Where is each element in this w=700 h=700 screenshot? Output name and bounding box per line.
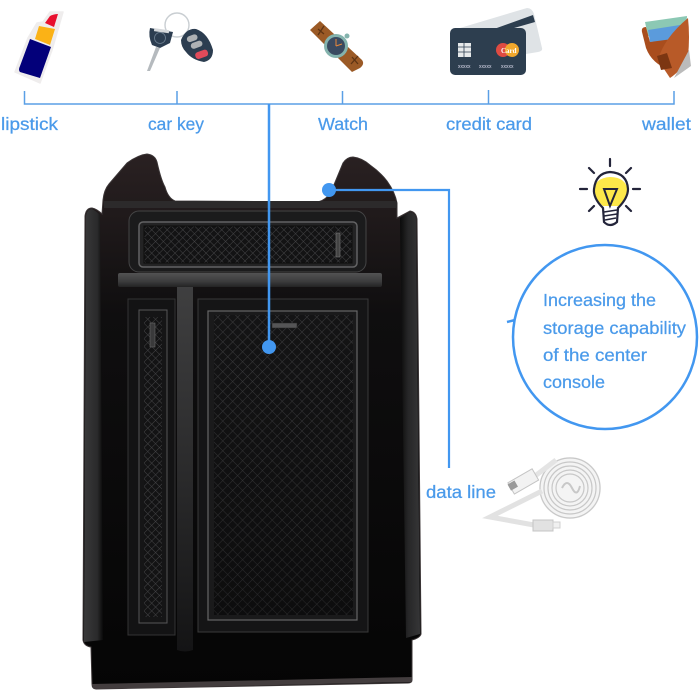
label: Watch: Watch	[318, 114, 368, 134]
callout text: Increasing the	[543, 290, 656, 310]
icon: credit card: xxxxx	[479, 64, 492, 70]
callout: contents line to tray	[262, 104, 276, 354]
callout: data line connector	[322, 183, 449, 468]
label: wallet: wallet	[641, 114, 691, 134]
icon: data cable	[490, 457, 601, 531]
circle outline	[507, 245, 697, 429]
label: lipstick: lipstick	[1, 114, 58, 134]
icon: credit card: xxxxx	[458, 64, 471, 70]
bottom lip	[92, 677, 412, 689]
left wall highlight	[84, 209, 103, 642]
callout text: console	[543, 372, 605, 392]
right wall highlight	[400, 212, 420, 638]
callout text	[543, 290, 686, 392]
icon: lipstick	[15, 12, 63, 83]
top label bracket	[24, 90, 674, 104]
icon: watch	[310, 21, 363, 72]
icon: credit card: Card	[501, 47, 517, 55]
upper rim	[104, 201, 397, 208]
horizontal divider	[118, 273, 382, 287]
callout text: storage capability	[543, 318, 686, 338]
icon: car key	[147, 13, 213, 71]
console tray organizer	[83, 154, 421, 689]
callout text: of the center	[543, 345, 647, 365]
left compartment	[128, 299, 175, 635]
icon: credit card	[450, 8, 542, 75]
label: car key: car key	[148, 114, 204, 134]
label: credit card: credit card	[446, 114, 532, 134]
right compartment	[198, 299, 368, 632]
callout circle	[507, 245, 697, 429]
label: data line: data line	[426, 482, 496, 502]
tray outer body	[83, 154, 421, 689]
icon: credit card: xxxxx	[501, 64, 514, 70]
vertical divider	[177, 285, 193, 652]
top compartment	[129, 211, 366, 272]
icon: light bulb	[580, 159, 640, 225]
icon: wallet	[642, 16, 691, 78]
